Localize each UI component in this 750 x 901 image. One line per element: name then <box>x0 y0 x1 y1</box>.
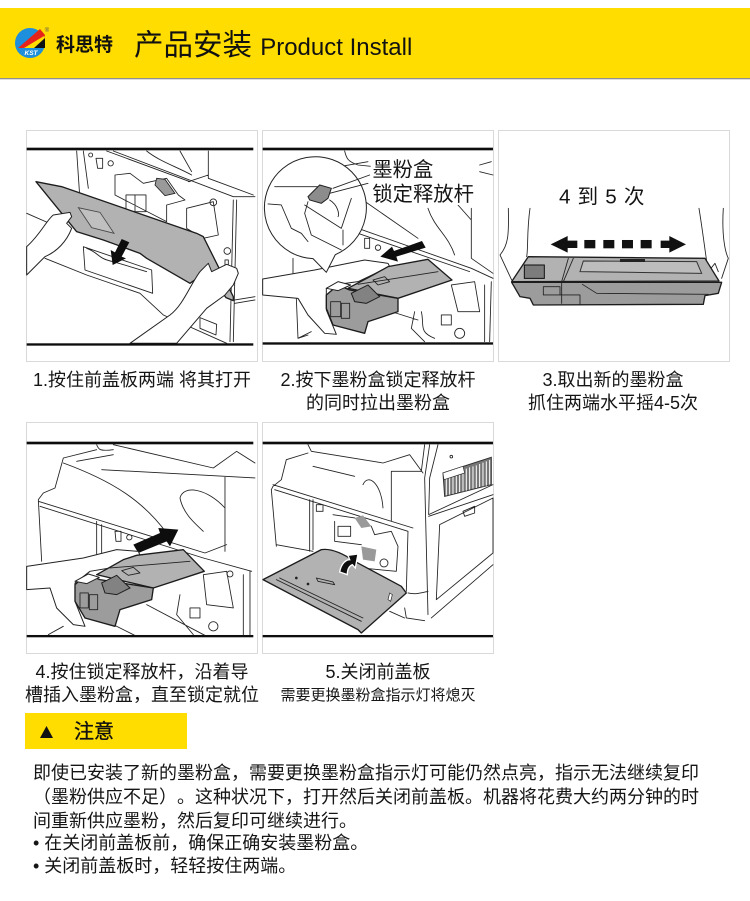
panel: step 5 close front cover <box>262 422 494 654</box>
notice body text: （墨粉供应不足）。这种状况下，打开然后关闭前盖板。机器将花费大约两分钟的时 <box>33 787 699 807</box>
caption: step 3: 3.取出新的墨粉盒 <box>542 370 684 390</box>
caption: step 4: 槽插入墨粉盒，直至锁定就位 <box>25 685 259 705</box>
notice body text <box>33 763 699 876</box>
arrow: horizontal shake <box>551 236 686 253</box>
brand name: 科思特 <box>56 34 113 56</box>
label: 4 to 5 times: 4 到 5 次 <box>559 185 645 208</box>
caption: step 2: 的同时拉出墨粉盒 <box>306 393 450 413</box>
caption: step 4: 4.按住锁定释放杆，沿着导 <box>35 662 249 682</box>
icon: KST logo: KST <box>24 50 39 57</box>
notice body text: 即使已安装了新的墨粉盒，需要更换墨粉盒指示灯可能仍然点亮，指示无法继续复印 <box>33 763 699 783</box>
panel: step 1 open front cover <box>26 130 258 362</box>
caption: step 5: 需要更换墨粉盒指示灯将熄灭 <box>280 687 476 704</box>
callout: toner cartridge lock release lever <box>371 158 479 206</box>
icon: KST logo: ® <box>45 27 50 34</box>
notice body text: 间重新供应墨粉，然后复印可继续进行。 <box>33 811 357 831</box>
panel: step 4 insert cartridge <box>26 422 258 654</box>
notice heading <box>25 713 187 749</box>
header banner <box>0 8 750 80</box>
caption: step 3: 抓住两端水平摇4-5次 <box>528 393 698 413</box>
caption: step 5: 5.关闭前盖板 <box>325 662 431 682</box>
caption: step 2: 2.按下墨粉盒锁定释放杆 <box>280 370 476 390</box>
caption: step 3 <box>528 370 698 413</box>
caption: step 5 <box>280 662 476 704</box>
caption: step 1: 1.按住前盖板两端 将其打开 <box>33 370 251 390</box>
panel: step 2 pull out toner cartridge <box>262 130 494 362</box>
icon: KST logo <box>15 27 50 58</box>
notice heading: 注意 <box>74 720 114 743</box>
caption: step 4 <box>25 662 259 705</box>
notice body text: • 关闭前盖板时，轻轻按住两端。 <box>33 856 296 876</box>
notice body text: • 在关闭前盖板前，确保正确安装墨粉盒。 <box>33 833 368 853</box>
panel: step 3 shake new cartridge <box>498 130 730 362</box>
callout: toner cartridge lock release lever: 锁定释放杆 <box>372 183 474 206</box>
callout: toner cartridge lock release lever: 墨粉盒 <box>372 159 433 182</box>
title: 产品安装 Product Install <box>134 29 412 62</box>
caption: step 2 <box>280 370 476 413</box>
